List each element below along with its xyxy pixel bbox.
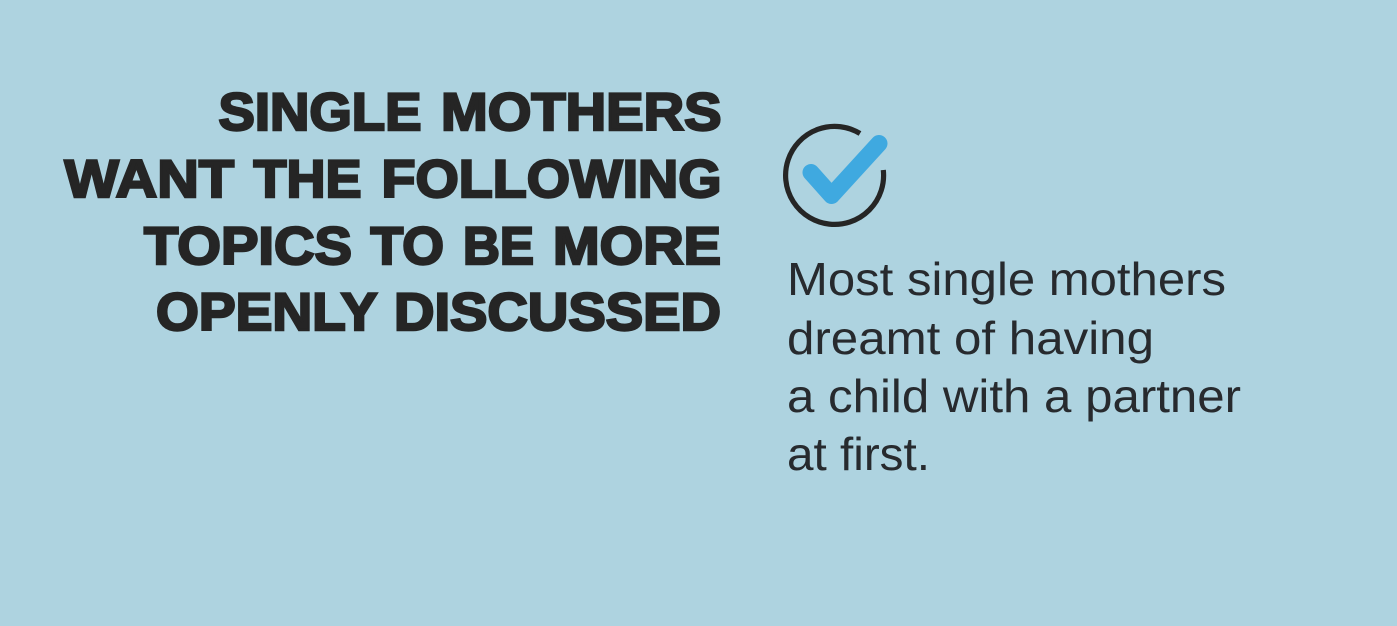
heading: topics to be more openly discussed: WANT xyxy=(64,150,234,209)
icon: check mark in circle xyxy=(786,126,884,224)
heading: topics to be more openly discussed: MORE xyxy=(553,217,721,276)
heading: topics to be more openly discussed: TOPICS xyxy=(144,217,352,276)
heading: topics to be more openly discussed: FOLLOWING xyxy=(382,150,722,209)
text block: most single mothers dreamt of having a child with a partner at first: a child with a partner xyxy=(787,370,1241,422)
heading: topics to be more openly discussed: OPENLY xyxy=(156,283,378,342)
heading: topics to be more openly discussed xyxy=(64,83,722,342)
heading: topics to be more openly discussed: THE xyxy=(254,150,362,209)
heading: topics to be more openly discussed: MOTHERS xyxy=(441,83,722,142)
text block: most single mothers dreamt of having a child with a partner at first xyxy=(787,253,1241,480)
text block: most single mothers dreamt of having a child with a partner at first: dreamt of having xyxy=(787,312,1154,364)
heading: topics to be more openly discussed: DISCUSSED xyxy=(394,283,721,342)
text block: most single mothers dreamt of having a child with a partner at first: at first. xyxy=(787,428,930,480)
heading: topics to be more openly discussed: SINGLE xyxy=(218,83,422,142)
text block: most single mothers dreamt of having a child with a partner at first: Most single mothers xyxy=(787,253,1226,305)
heading: topics to be more openly discussed: BE xyxy=(463,217,534,276)
heading: topics to be more openly discussed: TO xyxy=(370,217,444,276)
